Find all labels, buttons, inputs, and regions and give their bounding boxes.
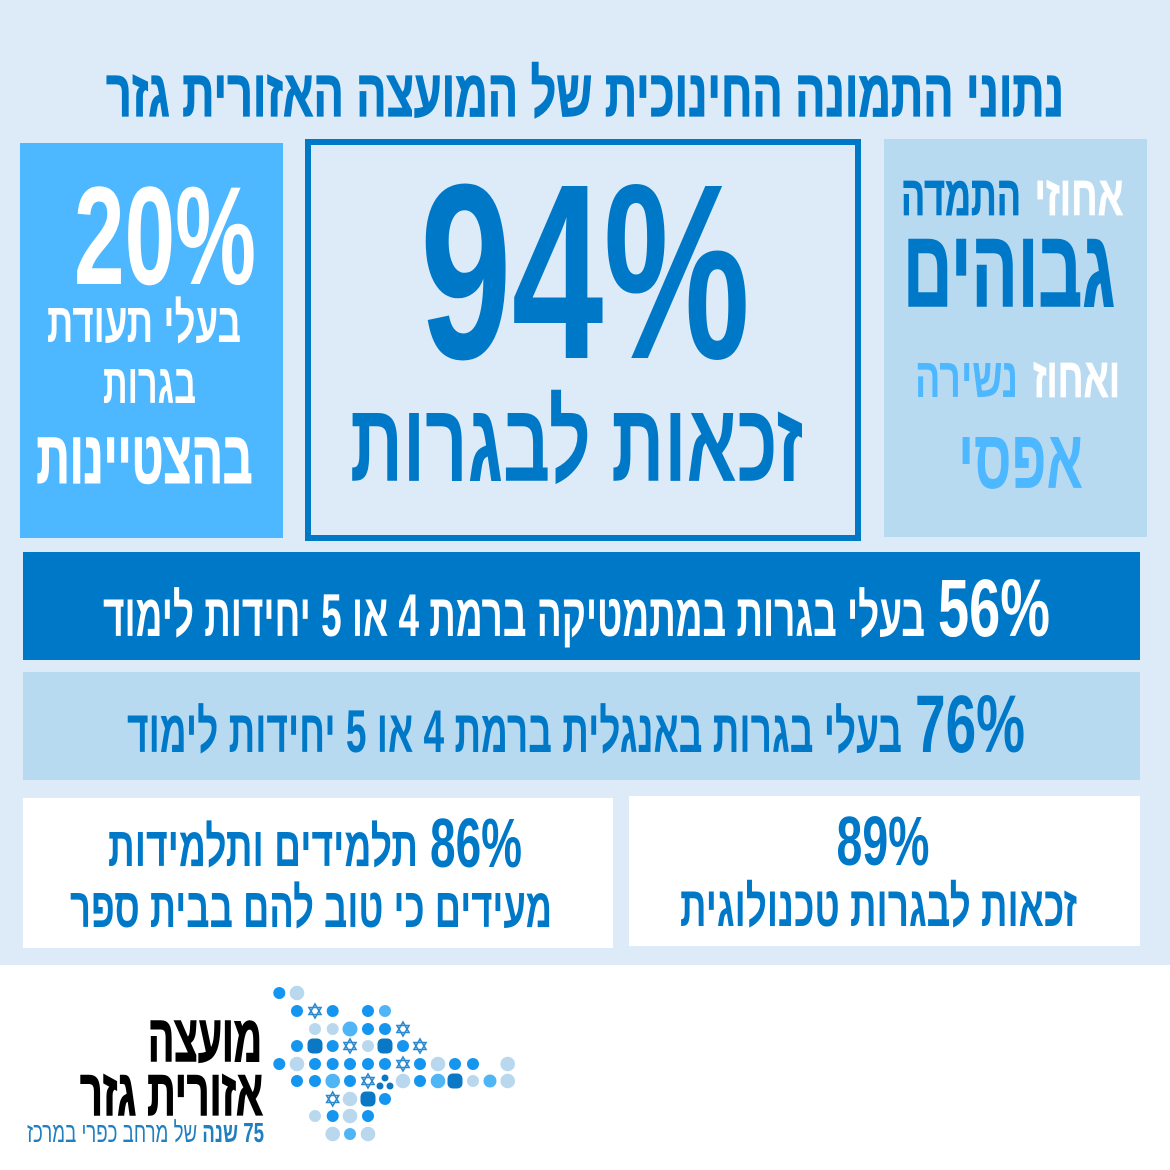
89% figure: 89% (836, 802, 930, 880)
text: matriculation: בגרות (103, 352, 196, 415)
logo: Gezer Regional Council (27, 986, 515, 1148)
panel: 86% students (23, 798, 613, 948)
text: with distinction: בהצטיינות (36, 416, 252, 499)
logo text: Gezer region: אזורית גזר (80, 1056, 263, 1129)
text: zero: אפסי (958, 412, 1083, 506)
text: English units: בעלי בגרות באנגלית ברמת 4 או 5 יחידות לימוד (127, 698, 902, 765)
94% figure: 94% (420, 132, 750, 411)
text: feel good at school: מעידים כי טוב להם בבית ספר (70, 876, 552, 939)
text: eligible for matriculation: זכאות לבגרות (350, 380, 803, 505)
text: and rate: ואחוז (1033, 346, 1120, 409)
56% figure: 56% (938, 563, 1050, 654)
text: dropout: נשירה (915, 346, 1018, 409)
logo tagline: 75 שנה של מרחב כפרי במרכז (27, 1117, 264, 1148)
86% figure: 86% (430, 804, 522, 882)
panel: 89% technological (629, 796, 1140, 946)
bar: 56% mathematics (23, 552, 1140, 660)
text: persistence rates: אחוזי (1034, 164, 1124, 227)
text: matriculation certificate holders: בעלי תעודת (47, 291, 241, 354)
bar: 76% English (23, 672, 1140, 780)
20% figure: 20% (74, 157, 256, 314)
logo text: council: מועצה (148, 1001, 262, 1075)
76% figure: 76% (915, 679, 1025, 770)
panel: 94% matriculation eligibility (308, 132, 858, 538)
text: students: תלמידים ותלמידות (108, 815, 418, 878)
text: persistence: התמדה (901, 164, 1021, 227)
panel: 20% excellence (20, 143, 283, 538)
panel: persistence and dropout (884, 139, 1147, 537)
logo emblem: dots and stars (273, 986, 515, 1141)
